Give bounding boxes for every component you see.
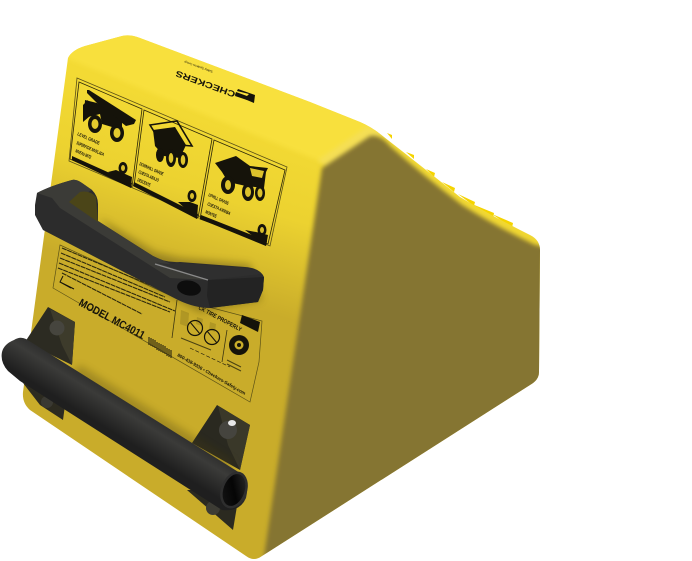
logo: Checkers	[174, 60, 255, 103]
grade captions: NIVEAU MITE	[75, 148, 92, 160]
handle end facet	[207, 277, 264, 308]
side teeth on far edge	[387, 133, 513, 228]
tube opening	[218, 471, 250, 509]
top-right highlight band	[318, 126, 382, 166]
arrow	[60, 276, 74, 289]
tire panel: CK TIRE PROPERLY	[197, 305, 242, 333]
grade captions: CUESTA ABAJO	[138, 169, 160, 183]
model number: MODEL MC4011	[77, 297, 147, 342]
ground wedges and wheels	[72, 156, 268, 246]
front face	[22, 35, 540, 559]
barcode	[149, 337, 171, 358]
top face	[68, 35, 380, 158]
illustration: yellow wheel chock product	[2, 35, 540, 559]
grade captions: DOWNHILL GRADE	[139, 161, 164, 176]
grade captions	[75, 131, 232, 219]
upper-right bracket	[192, 405, 250, 470]
warning and model label	[53, 245, 262, 402]
grade captions: LEVEL GRADE	[77, 131, 101, 146]
grade captions: UPHILL GRADE	[208, 192, 230, 206]
bolt	[50, 320, 64, 336]
carry handle	[35, 180, 264, 308]
grade captions: SUPERFICIE NIVELADA	[76, 140, 105, 157]
upper-left bracket	[25, 307, 75, 365]
truck grade label	[69, 78, 287, 246]
side face	[262, 136, 560, 561]
handle shadow	[100, 218, 262, 312]
warning text lines	[58, 248, 175, 314]
grade captions: MONTEE	[205, 209, 218, 219]
tube shadow	[70, 365, 235, 472]
bolt	[219, 421, 237, 439]
logo: Checkers: CHECKERS	[174, 68, 237, 100]
lower-left bracket	[23, 383, 65, 420]
handle top bevel	[37, 180, 208, 280]
grade captions: DESCENTE	[137, 177, 151, 188]
handle inner recess	[69, 192, 98, 222]
grade captions: CUESTA ARRIBA	[207, 201, 232, 216]
contact line: 800-438-9336 • Checkers-Safety.com	[176, 353, 247, 396]
truck 3	[215, 156, 268, 201]
grab bar tube	[2, 338, 253, 512]
chock body	[22, 35, 540, 559]
lower-right bracket	[187, 490, 238, 530]
tire panel	[172, 300, 260, 371]
truck 1	[83, 90, 136, 142]
logo: Checkers: Safety Systems Group	[183, 60, 213, 74]
handle hole	[176, 279, 202, 297]
truck 2	[150, 121, 192, 168]
